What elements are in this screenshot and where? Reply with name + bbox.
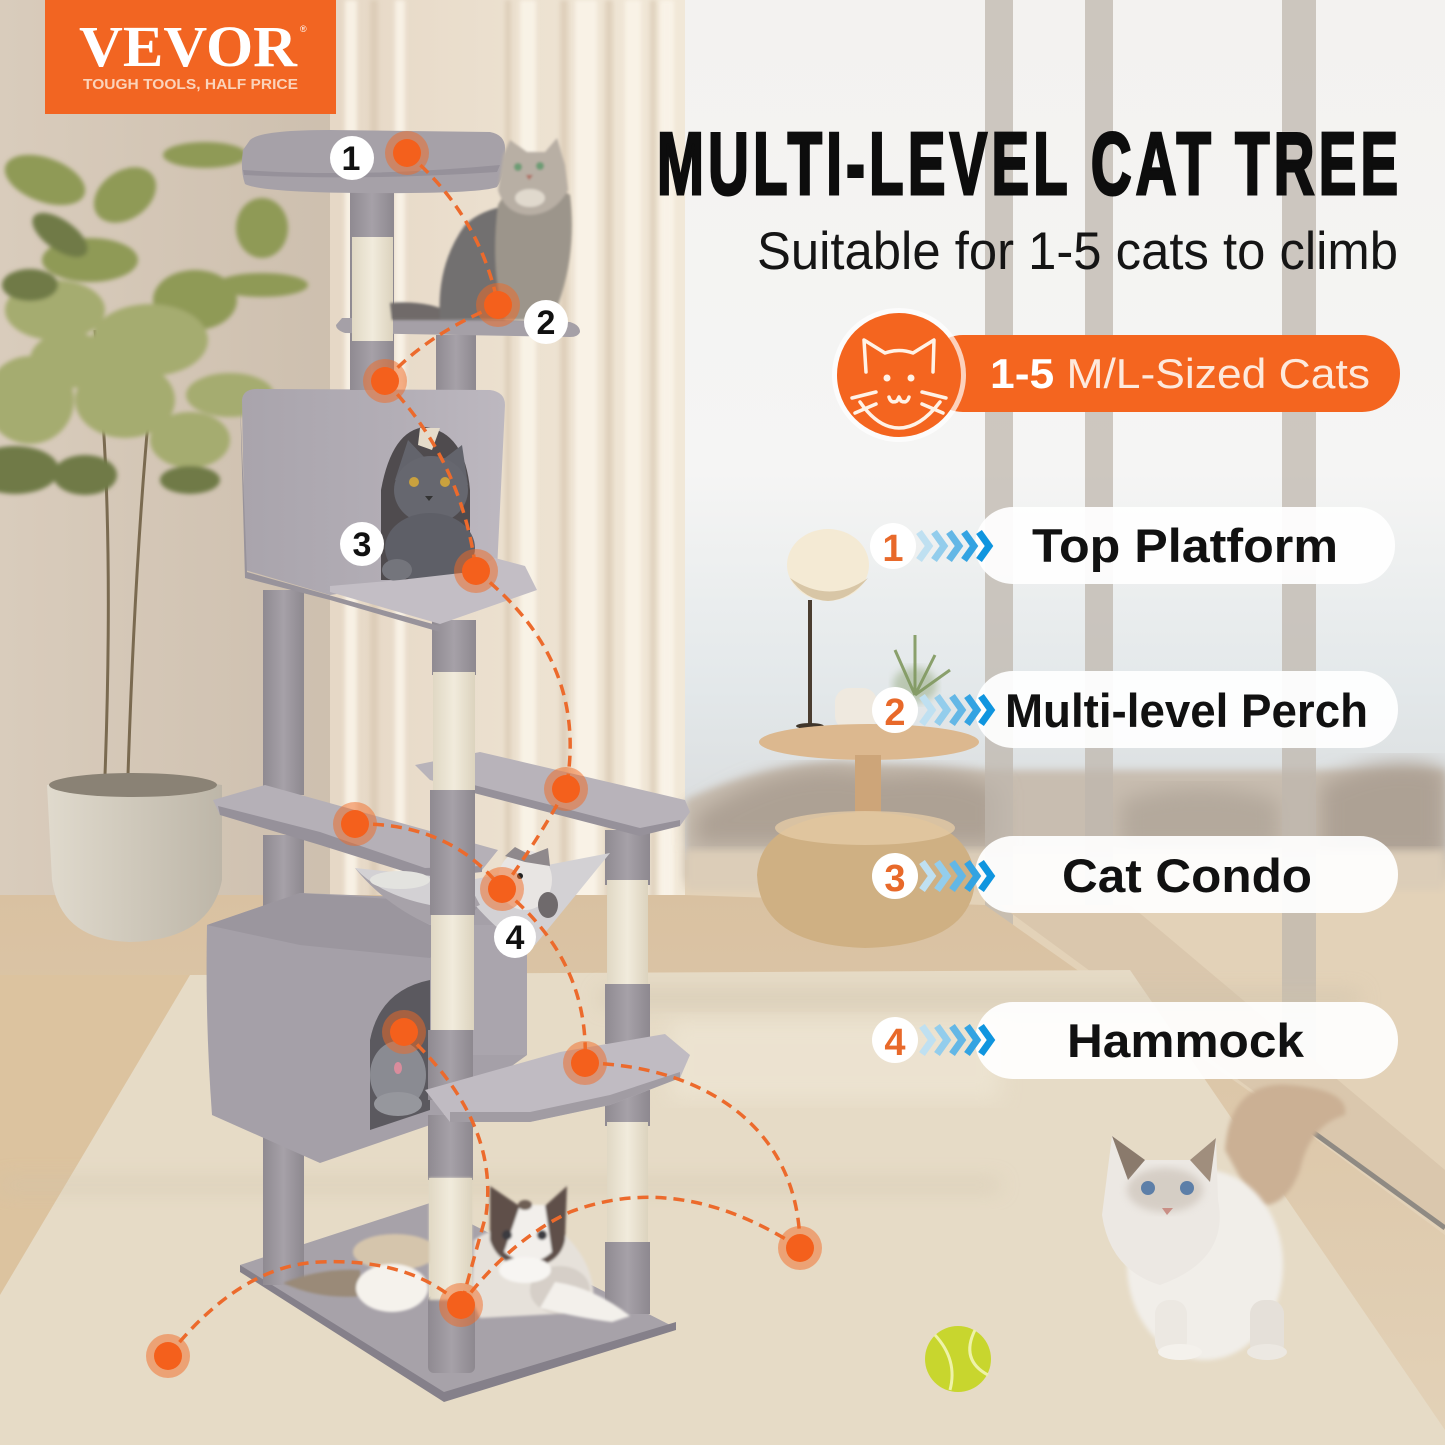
upper condo (240, 190, 537, 632)
feature label 3: Cat Condo (1062, 849, 1312, 902)
title: MULTI-LEVEL CAT TREE (657, 114, 1398, 213)
hammock (355, 847, 610, 946)
potted plant (0, 142, 308, 942)
tree number badges (330, 136, 568, 958)
feature label 3: 3 (884, 858, 906, 900)
chevrons (922, 696, 991, 724)
badge 2 (524, 300, 568, 344)
pouf (757, 812, 975, 948)
lower condo doorway with grey cat (370, 980, 430, 1130)
top platform (242, 130, 580, 390)
feature label 1: 1 (882, 528, 904, 570)
window view (685, 0, 1445, 890)
left wall (0, 0, 345, 900)
feature label 2: 2 (884, 692, 906, 734)
badge 3 (340, 522, 384, 566)
feature label 1: Top Platform (1032, 519, 1338, 572)
floor (0, 895, 1445, 1445)
lower condo (207, 893, 527, 1163)
chevrons (919, 532, 989, 560)
upper left platform (213, 785, 498, 876)
plant stems (95, 330, 150, 775)
feature label 2 (872, 671, 1398, 748)
rug (0, 970, 1445, 1445)
rear left posts (263, 590, 304, 795)
cat in hammock (370, 847, 558, 918)
tabby cat on perch (390, 138, 572, 320)
window frames (985, 0, 1316, 1120)
cat tree (207, 130, 690, 1402)
upper right platform (415, 752, 690, 835)
condo platform (330, 558, 537, 624)
feature label 1 (870, 507, 1395, 584)
badge 2: 2 (537, 304, 555, 342)
lower right platform (425, 1034, 690, 1122)
ragdoll cat on base (283, 1178, 630, 1322)
grey cat in upper condo (382, 440, 475, 583)
VEVOR logo: TOUGH TOOLS, HALF PRICE (83, 77, 298, 93)
feature label 4: Hammock (1067, 1014, 1305, 1067)
plant pot (47, 778, 222, 942)
right post with sisal (605, 830, 650, 1314)
curtain (330, 0, 685, 900)
feature label 2: Multi-level Perch (1005, 684, 1368, 737)
badge 1: 1 (342, 140, 360, 178)
feature label 4 (872, 1002, 1398, 1079)
capacity badge (832, 308, 1400, 442)
VEVOR logo: ® (300, 24, 307, 34)
base (240, 1203, 676, 1400)
tennis ball (925, 1326, 991, 1392)
badge 4 (494, 916, 536, 958)
subtitle: Suitable for 1-5 cats to climb (757, 222, 1398, 281)
chevrons (922, 1026, 991, 1054)
plant leaves (0, 142, 308, 495)
perch platform (336, 318, 580, 337)
climbing route dashed paths (168, 153, 800, 1356)
badge 1 (330, 136, 374, 180)
badge 4: 4 (506, 919, 525, 957)
VEVOR logo (45, 0, 336, 114)
feature label 3 (872, 836, 1398, 913)
chevrons (922, 862, 991, 890)
capacity badge: 1-5 M/L-Sized Cats (990, 350, 1370, 397)
badge 3: 3 (353, 526, 371, 564)
route dots (146, 131, 822, 1378)
cat standing on rug (1102, 1085, 1345, 1360)
side table, lamp and pouf (757, 529, 979, 948)
lamp (787, 529, 869, 729)
center post with sisal (428, 620, 476, 1373)
icon: cat face (852, 340, 946, 428)
VEVOR logo: VEVOR (79, 14, 298, 79)
upper condo doorway (381, 427, 470, 580)
feature label 4: 4 (884, 1022, 906, 1064)
table (759, 724, 979, 760)
plant and vase (835, 635, 950, 730)
